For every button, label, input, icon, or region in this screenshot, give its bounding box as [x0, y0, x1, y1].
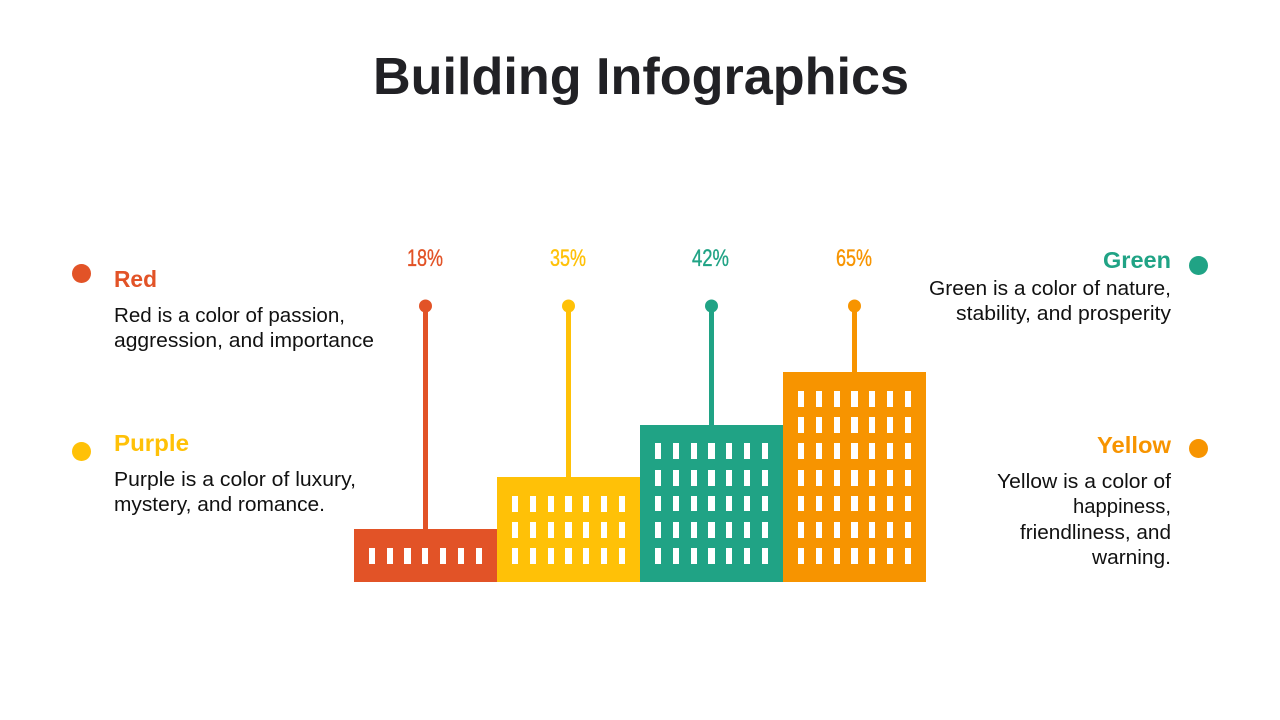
panel: green legend — [929, 247, 1208, 325]
yellow description: friendliness, and — [1020, 522, 1171, 544]
panel: yellow legend — [997, 432, 1208, 569]
yellow description: Yellow is a color of — [997, 471, 1171, 493]
panel: purple legend — [72, 430, 356, 516]
green building body — [640, 425, 783, 582]
chart: yellow building 35% — [497, 245, 640, 582]
chart: red building 18% — [354, 245, 497, 582]
red heading: Red — [114, 266, 157, 292]
title: Building Infographics — [373, 48, 909, 106]
purple description: Purple is a color of luxury, — [114, 469, 356, 491]
green description: stability, and prosperity — [956, 303, 1171, 325]
yellow description: warning. — [1091, 547, 1171, 569]
yellow building body — [497, 477, 640, 582]
yellow pole — [566, 306, 571, 478]
purple heading: Purple — [114, 430, 189, 456]
red description: Red is a color of passion, — [114, 305, 345, 327]
orange pole — [852, 306, 857, 373]
yellow heading: Yellow — [1097, 432, 1171, 458]
icon: green dot — [1189, 256, 1208, 275]
green pole — [709, 306, 714, 426]
chart: green building 42% — [640, 245, 783, 582]
orange building body — [783, 372, 926, 582]
red building windows — [369, 548, 482, 564]
icon: yellow dot — [72, 442, 91, 461]
green heading: Green — [1103, 247, 1171, 273]
red pole — [423, 306, 428, 530]
green description: Green is a color of nature, — [929, 278, 1171, 300]
red value: 18% — [407, 245, 443, 272]
yellow building windows — [512, 496, 625, 564]
orange building windows — [798, 391, 911, 564]
red description: aggression, and importance — [114, 330, 374, 352]
green pole cap — [705, 300, 718, 312]
orange value: 65% — [836, 245, 872, 272]
green value: 42% — [692, 245, 729, 272]
green building windows — [655, 443, 768, 564]
chart: orange building 65% — [783, 245, 926, 582]
yellow description: happiness, — [1073, 496, 1171, 518]
red pole cap — [419, 300, 432, 312]
icon: orange dot — [1189, 439, 1208, 458]
purple description: mystery, and romance. — [114, 494, 325, 516]
orange pole cap — [848, 300, 861, 312]
icon: red dot — [72, 264, 91, 283]
yellow pole cap — [562, 300, 575, 312]
red building body — [354, 529, 497, 582]
panel: red legend — [72, 264, 374, 352]
yellow value: 35% — [550, 245, 586, 272]
